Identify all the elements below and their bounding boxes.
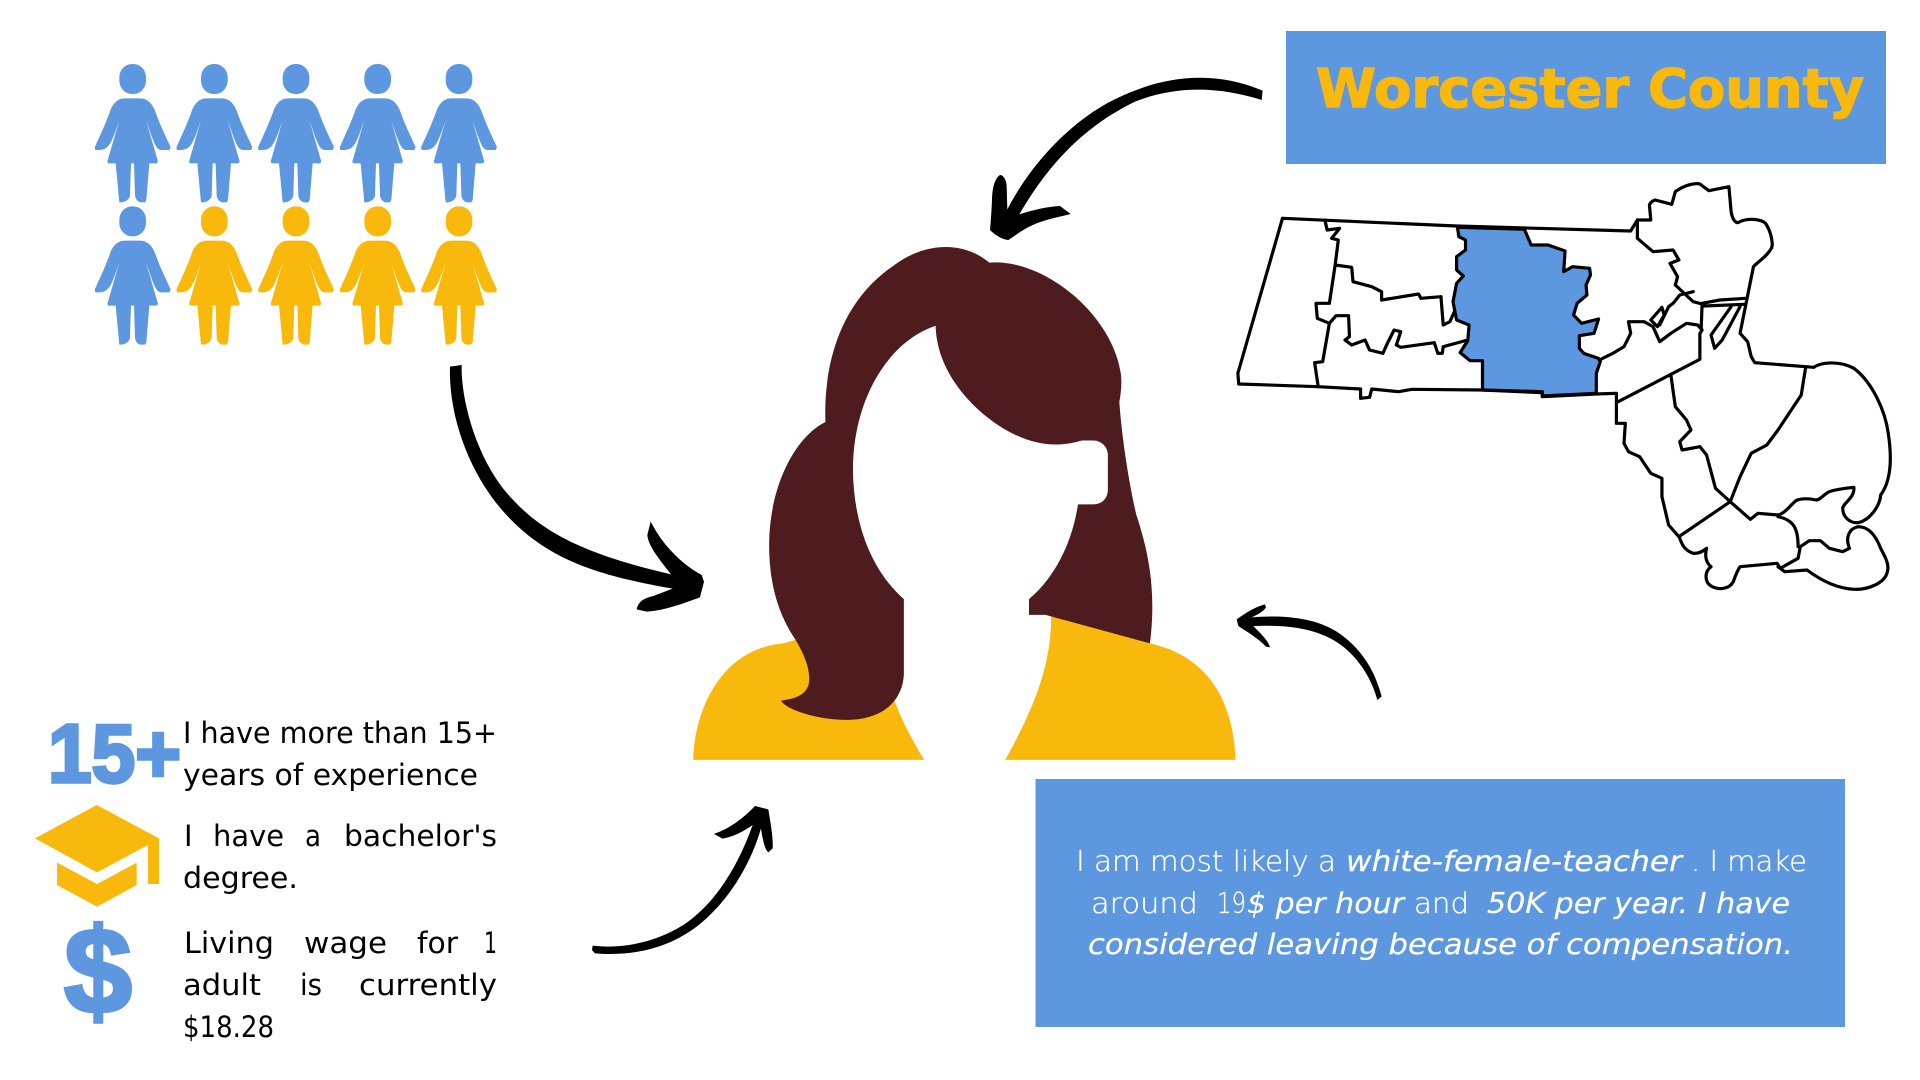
description text: $ per hour xyxy=(1247,887,1406,920)
title text: Worcester County xyxy=(1316,57,1864,120)
degree text xyxy=(183,819,497,895)
degree text: degree. xyxy=(183,861,298,895)
arrow: from credentials to person xyxy=(592,806,773,954)
degree text: I xyxy=(184,819,193,853)
experience text: I have more than 15+ xyxy=(183,716,497,750)
credentials: experience, degree, living wage xyxy=(35,707,497,1044)
icon row: one blue and four yellow women xyxy=(95,206,497,345)
description text: and xyxy=(1414,887,1469,920)
living wage text: for xyxy=(417,926,458,960)
map: Massachusetts counties with Worcester highlighted xyxy=(1238,184,1890,589)
degree text: a xyxy=(305,819,321,853)
arrow: from pictogram to person xyxy=(450,365,704,612)
pictogram: ten women, six blue and four yellow xyxy=(95,64,497,345)
icon: graduation cap xyxy=(35,805,159,907)
description text: around xyxy=(1091,887,1198,920)
description panel xyxy=(1036,779,1845,1027)
description text xyxy=(1076,845,1807,961)
living wage text: wage xyxy=(304,926,387,960)
living wage text xyxy=(183,926,497,1044)
living wage text: $18.28 xyxy=(183,1010,274,1044)
living wage text: is xyxy=(300,968,322,1002)
description text: 19 xyxy=(1217,887,1246,920)
living wage text: adult xyxy=(183,968,261,1002)
icon: dollar sign: $ xyxy=(64,903,132,1039)
icon row: five blue women xyxy=(95,64,497,202)
living wage text: 1 xyxy=(484,926,497,960)
degree text: have xyxy=(213,819,284,853)
experience figure: 15+: 15+ xyxy=(48,707,181,800)
Worcester county highlighted xyxy=(1453,227,1600,396)
state outline and county borders xyxy=(1238,184,1890,589)
description text: white-female-teacher xyxy=(1346,845,1684,878)
shirt right xyxy=(1005,616,1236,760)
living wage text: currently xyxy=(359,968,497,1002)
illustration: faceless woman with dark hair xyxy=(693,247,1236,760)
description text: 50K per year. I have xyxy=(1487,887,1790,920)
living wage text: Living xyxy=(184,926,274,960)
experience text xyxy=(183,716,497,792)
experience text: years of experience xyxy=(183,758,478,792)
shirt left xyxy=(693,640,924,760)
arrow: from description box to person xyxy=(1237,604,1382,700)
description text: I am most likely a xyxy=(1076,845,1336,878)
arrow: from county title to person xyxy=(990,78,1263,240)
description text: . I make xyxy=(1691,845,1807,878)
description text: considered leaving because of compensation. xyxy=(1088,928,1793,961)
degree text: bachelor's xyxy=(344,819,497,853)
hair xyxy=(769,247,1152,720)
title panel: Worcester County xyxy=(1286,31,1886,164)
